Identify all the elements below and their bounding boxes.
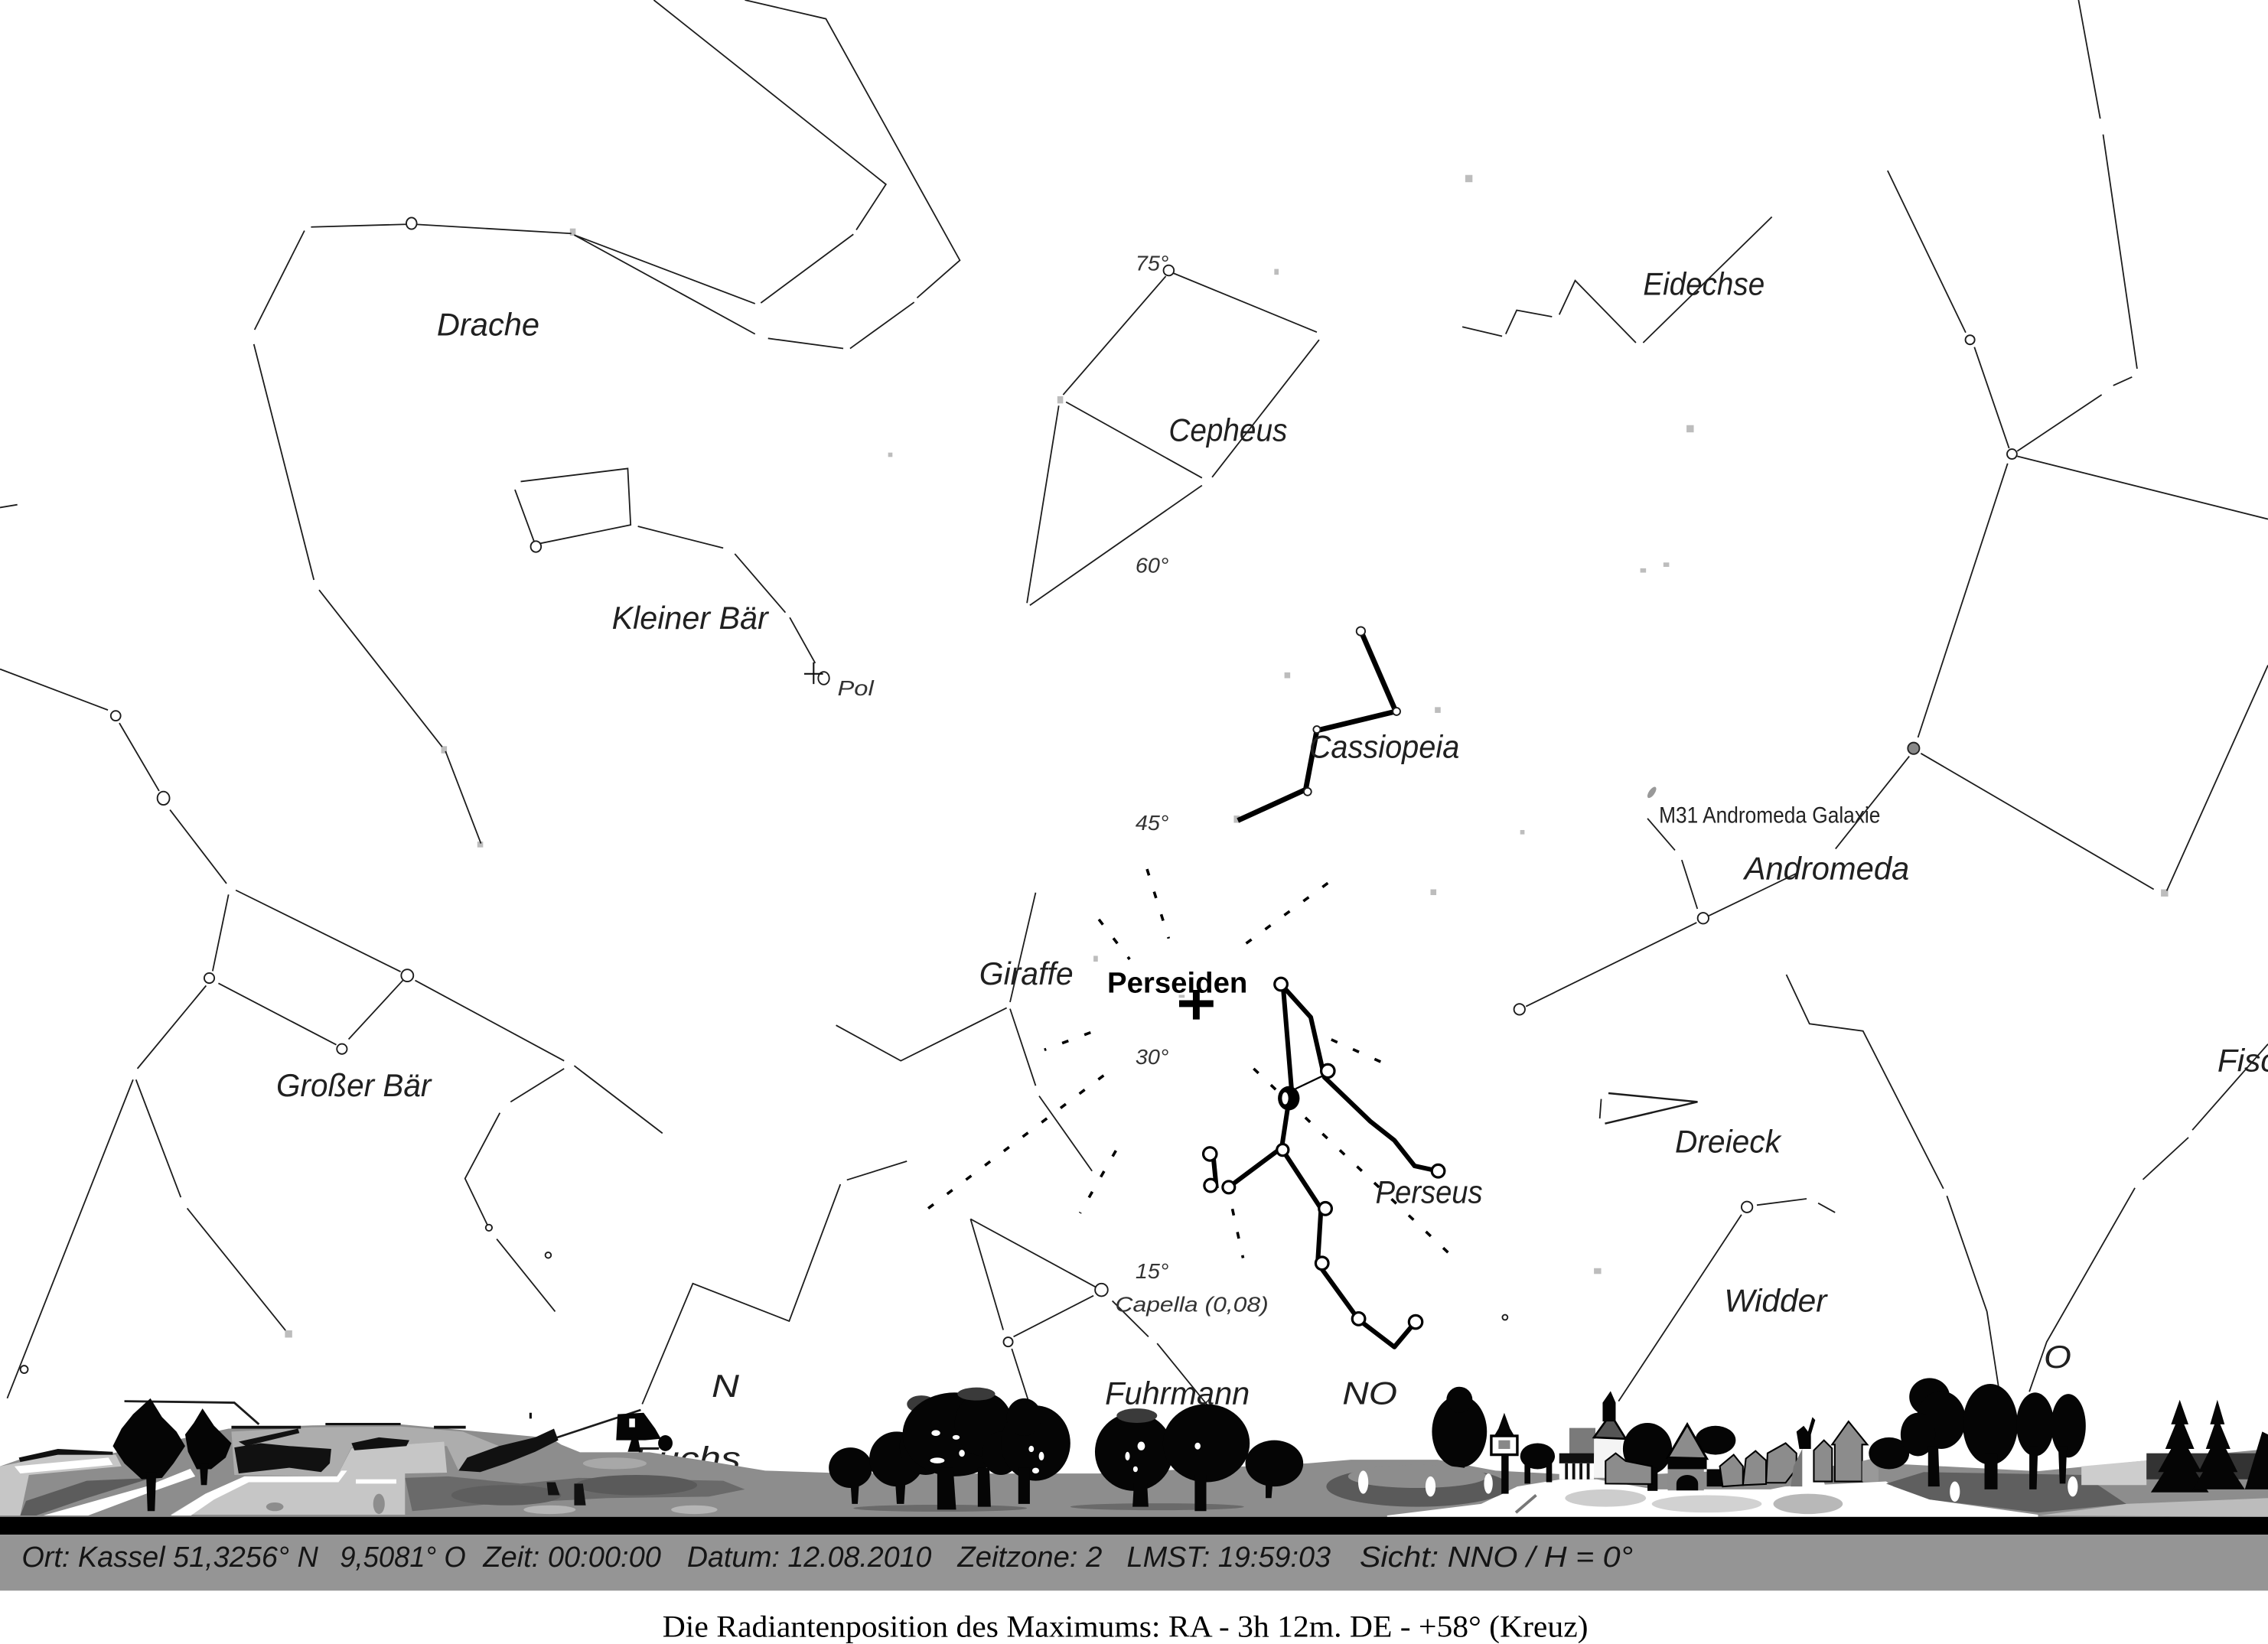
constellation: Fuhrmann bbox=[970, 1219, 1207, 1410]
status: time zone: Zeitzone: 2 bbox=[956, 1541, 1102, 1574]
label: M31 Andromeda Galaxie: M31 Andromeda Galaxie bbox=[1659, 803, 1880, 829]
compass: N: N bbox=[712, 1368, 740, 1404]
faint background stars bbox=[285, 175, 2169, 1337]
radiant cross bbox=[1179, 990, 1214, 1020]
pole star marker: Pol bbox=[837, 676, 875, 700]
label: Widder: Widder bbox=[1724, 1282, 1829, 1318]
label: Giraffe: Giraffe bbox=[979, 955, 1074, 991]
trees, right bbox=[1869, 1378, 2268, 1493]
radiant label: Perseiden: Perseiden bbox=[1107, 968, 1247, 1000]
label: Drache: Drache bbox=[437, 307, 539, 343]
status bar bbox=[0, 1535, 2268, 1590]
constellation: Giraffe and Luchs bbox=[125, 893, 1092, 1438]
label: Fuhrmann: Fuhrmann bbox=[1105, 1375, 1250, 1411]
village bbox=[1520, 1391, 1879, 1491]
constellation: Drache bbox=[254, 0, 960, 844]
altitude scale labels bbox=[1136, 251, 1168, 1283]
constellation: Dreieck bbox=[1600, 1093, 1697, 1124]
status bar black band bbox=[0, 1517, 2268, 1535]
label: Fuchs: Fuchs bbox=[634, 1440, 741, 1476]
altitude scale labels: 45° bbox=[1136, 811, 1168, 835]
trees, left bbox=[112, 1398, 673, 1511]
altitude scale labels: 60° bbox=[1136, 554, 1168, 578]
constellation: Widder bbox=[1502, 1199, 1835, 1401]
constellation: Kleiner Bär bbox=[515, 468, 815, 663]
label: Andromeda: Andromeda bbox=[1742, 850, 1909, 886]
label: Cepheus: Cepheus bbox=[1168, 412, 1287, 448]
status: time: Zeit: 00:00:00 bbox=[482, 1541, 661, 1574]
label: Dreieck: Dreieck bbox=[1675, 1124, 1782, 1160]
label: Großer Bär: Großer Bär bbox=[276, 1067, 432, 1103]
status: sidereal time: LMST: 19:59:03 bbox=[1127, 1541, 1331, 1574]
altitude scale labels: 15° bbox=[1136, 1259, 1168, 1283]
constellation: Andromeda and Pegasus bbox=[1514, 0, 2268, 1015]
label: Eidechse: Eidechse bbox=[1643, 266, 1765, 302]
signpost bbox=[1491, 1413, 1517, 1494]
trees, centre bbox=[829, 1387, 1487, 1512]
altitude scale labels: 75° bbox=[1136, 251, 1168, 275]
altitude scale labels: 30° bbox=[1136, 1045, 1168, 1069]
label: Perseus: Perseus bbox=[1376, 1174, 1483, 1210]
pole star marker bbox=[804, 662, 875, 700]
constellation: Perseus bbox=[1204, 978, 1445, 1347]
caption: Die Radiantenposition des Maximums: RA - 3h 12m. DE - +58° (Kreuz) bbox=[663, 1610, 1589, 1644]
label: Kleiner Bär: Kleiner Bär bbox=[612, 600, 770, 636]
village road and islands bbox=[1326, 1460, 2268, 1517]
status: view direction: Sicht: NNO / H = 0° bbox=[1360, 1541, 1633, 1574]
label: Capella: Capella (0,08) bbox=[1115, 1292, 1269, 1316]
constellation: Großer Bär bbox=[0, 505, 663, 1398]
compass: NO: NO bbox=[1342, 1375, 1397, 1411]
radiant dashed lines bbox=[920, 869, 1452, 1258]
constellation: Cassiopeia bbox=[1238, 627, 1400, 821]
landscape panorama bbox=[0, 1378, 2268, 1519]
status: location: Ort: Kassel 51,3256° N bbox=[21, 1541, 319, 1574]
constellation: Eidechse bbox=[1462, 217, 1772, 343]
compass: O: O bbox=[2044, 1339, 2071, 1375]
label: Cassiopeia: Cassiopeia bbox=[1309, 728, 1459, 764]
constellation: Fische bbox=[1787, 975, 2268, 1392]
constellation: Cepheus bbox=[1027, 265, 1319, 605]
ground base bbox=[0, 1424, 2268, 1519]
hill shading, left bbox=[0, 1423, 745, 1515]
status: date: Datum: 12.08.2010 bbox=[687, 1541, 931, 1574]
status: longitude: 9,5081° O bbox=[340, 1541, 466, 1574]
